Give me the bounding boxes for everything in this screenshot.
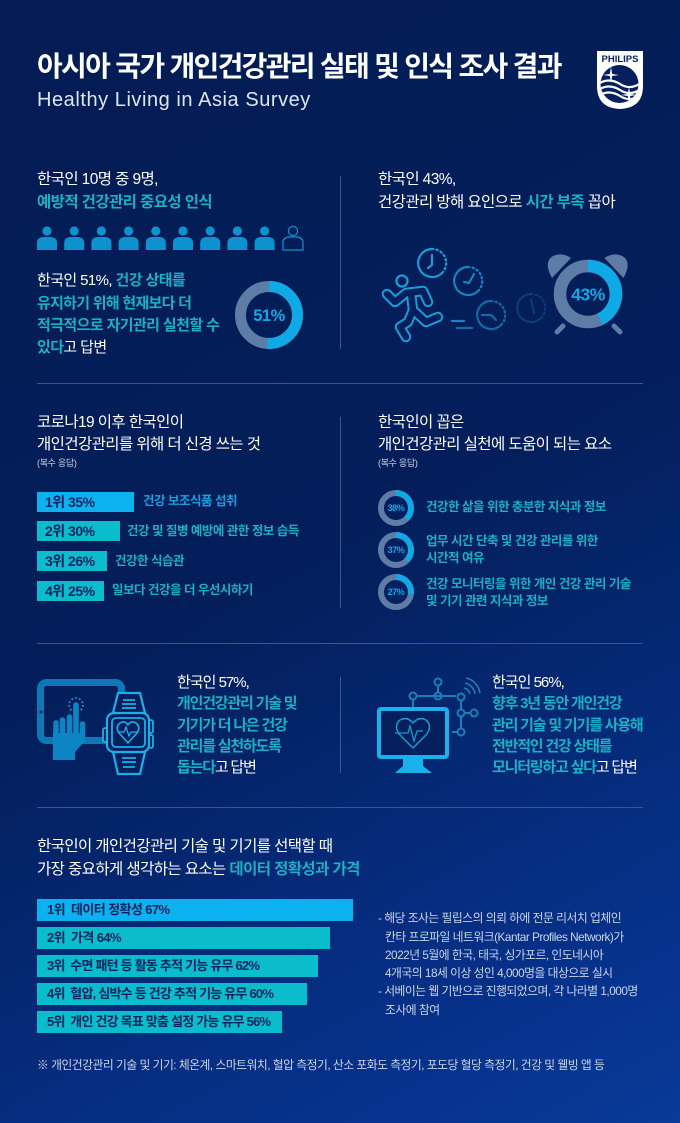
title: 아시아 국가 개인건강관리 실태 및 인식 조사 결과 xyxy=(37,51,561,82)
heading: 43 percent: 한국인 43%, xyxy=(378,171,456,188)
text: 51 percent statement: 유지하기 위해 현재보다 더 xyxy=(37,295,191,312)
text: 51 percent statement: 있다고 답변 xyxy=(37,339,107,356)
label 4: 일보다 건강을 더 우선시하기 xyxy=(112,583,253,597)
bar 2: 2위 가격 64% xyxy=(47,930,121,945)
heading: selection criteria xyxy=(37,838,360,878)
bar 2: 2위 30% xyxy=(45,523,95,539)
chart: donut 51%: 51% xyxy=(253,307,286,325)
label 3: 건강한 식습관 xyxy=(115,554,184,568)
label: time margin: 시간적 여유 xyxy=(426,551,484,565)
text: 57 percent: 돕는다고 답변 xyxy=(177,759,256,776)
text: survey notes: 조사에 참여 xyxy=(385,1003,440,1017)
chart: donut 27%: 27% xyxy=(388,587,405,597)
text: survey notes: - 해당 조사는 필립스의 의뢰 하에 전문 리서치 업체인 xyxy=(378,911,621,925)
bar 5: 5위 개인 건강 목표 맞춤 설정 가능 유무 56% xyxy=(47,1014,270,1029)
label: monitoring technology xyxy=(426,577,631,608)
note: multiple answers: (복수 응답) xyxy=(37,458,77,468)
text: 56 percent: 향후 3년 동안 개인건강 xyxy=(492,695,621,712)
icon: monitor with heart and circuit xyxy=(377,677,481,773)
text: 51 percent statement: 한국인 51%, 건강 상태를 xyxy=(37,272,185,289)
text: 56 percent: 한국인 56%, xyxy=(492,674,564,691)
heading: 9 of 10: 한국인 10명 중 9명, xyxy=(37,171,158,188)
text: 51 percent statement: 적극적으로 자기관리 실천할 수 xyxy=(37,317,219,334)
label: time margin: 업무 시간 단축 및 건강 관리를 위한 xyxy=(426,534,598,548)
heading: selection criteria: 가장 중요하게 생각하는 요소는 데이터 정확성과 가격 xyxy=(37,861,360,878)
panel: lack of time xyxy=(378,171,616,211)
label: time margin xyxy=(426,534,598,565)
footnote: ※ 개인건강관리 기술 및 기기: 체온계, 스마트워치, 혈압 측정기, 산소 포화도 측정기, 포도당 혈당 측정기, 건강 및 웰빙 앱 등 xyxy=(37,1058,604,1072)
chart: alarm clock donut 43%: 43% xyxy=(571,284,606,304)
text: 56 percent: 관리 기술 및 기기를 사용해 xyxy=(492,717,642,734)
icon: people row xyxy=(37,226,304,251)
label: monitoring technology: 및 기기 관련 지식과 정보 xyxy=(426,594,548,608)
bar 4 xyxy=(37,983,307,1005)
bar 1: 1위 데이터 정확성 67% xyxy=(47,902,169,917)
text: 57 percent: 기기가 더 나은 건강 xyxy=(177,717,287,734)
text: survey notes xyxy=(378,911,638,1017)
text: survey notes: 칸타 프로파일 네트워크(Kantar Profiles Network)가 xyxy=(385,930,624,944)
bar 3: 3위 26% xyxy=(45,553,95,569)
bar 1 xyxy=(37,899,353,921)
bar chart: priorities xyxy=(37,492,299,601)
text: 56 percent: 전반적인 건강 상태를 xyxy=(492,738,611,755)
text: survey notes: 2022년 5월에 한국, 태국, 싱가포르, 인도네시아 xyxy=(385,948,603,962)
label: knowledge: 건강한 삶을 위한 충분한 지식과 정보 xyxy=(426,500,606,514)
bar 3 xyxy=(37,955,318,977)
bar 4: 4위 혈압, 심박수 등 건강 추적 기능 유무 60% xyxy=(47,986,273,1001)
chart: donut 38% xyxy=(378,490,414,526)
label: monitoring technology: 건강 모니터링을 위한 개인 건강 관리 기술 xyxy=(426,577,631,591)
panel: helpful factors xyxy=(378,414,612,468)
text: 56 percent: 모니터링하고 싶다고 답변 xyxy=(492,759,637,776)
subtitle: Healthy Living in Asia Survey xyxy=(37,89,311,111)
text: 57 percent: 한국인 57%, xyxy=(177,674,249,691)
chart: donut 38%: 38% xyxy=(388,503,405,513)
bar chart: selection factors xyxy=(37,899,353,1033)
bar 4 xyxy=(37,581,104,601)
heading: time shortage: 건강관리 방해 요인으로 시간 부족 꼽아 xyxy=(378,194,615,211)
panel: preventive care awareness xyxy=(37,171,304,356)
bar 2 xyxy=(37,521,120,541)
panel: covid priorities xyxy=(37,414,260,468)
chart: donut 51% xyxy=(235,281,303,349)
heading: highlight: 예방적 건강관리 중요성 인식 xyxy=(37,194,212,211)
bar 1 xyxy=(37,492,134,512)
icon: philips logo: PHILIPS xyxy=(602,54,638,65)
bar 5 xyxy=(37,1011,282,1033)
text: 57 percent xyxy=(177,674,297,776)
icon: philips logo xyxy=(597,51,643,109)
label 1: 건강 보조식품 섭취 xyxy=(143,494,237,508)
note: multiple answers: (복수 응답) xyxy=(378,458,418,468)
chart: donut 37% xyxy=(378,532,414,568)
heading line 2: 개인건강관리를 위해 더 신경 쓰는 것 xyxy=(37,436,260,453)
chart: donut 27% xyxy=(378,574,414,610)
heading line 2: 개인건강관리 실천에 도움이 되는 요소 xyxy=(378,436,611,453)
chart: donut 37%: 37% xyxy=(388,545,405,555)
icon: tablet, hand and smartwatch xyxy=(37,679,154,776)
text: 56 percent xyxy=(492,674,642,776)
heading: 한국인이 꼽은 xyxy=(378,414,464,431)
label 2: 건강 및 질병 예방에 관한 정보 습득 xyxy=(127,524,299,538)
text: 57 percent: 개인건강관리 기술 및 xyxy=(177,695,296,712)
bar 3: 3위 수면 패턴 등 활동 추적 기능 유무 62% xyxy=(47,958,259,973)
bar 4: 4위 25% xyxy=(45,583,95,599)
heading: 코로나19 이후 한국인이 xyxy=(37,414,183,431)
icon: running figure and clocks xyxy=(382,248,546,342)
text: 57 percent: 관리를 실천하도록 xyxy=(177,738,281,755)
text: survey notes: - 서베이는 웹 기반으로 진행되었으며, 각 나라별 1,000명 xyxy=(378,984,638,998)
text: survey notes: 4개국의 18세 이상 성인 4,000명을 대상으로 실시 xyxy=(385,966,613,980)
heading: selection criteria: 한국인이 개인건강관리 기술 및 기기를 선택할 때 xyxy=(37,838,332,855)
text: 51 percent statement xyxy=(37,272,220,356)
bar 1: 1위 35% xyxy=(45,494,95,510)
chart: alarm clock donut 43% xyxy=(548,254,628,334)
bar 3 xyxy=(37,551,107,571)
bar 2 xyxy=(37,927,330,949)
